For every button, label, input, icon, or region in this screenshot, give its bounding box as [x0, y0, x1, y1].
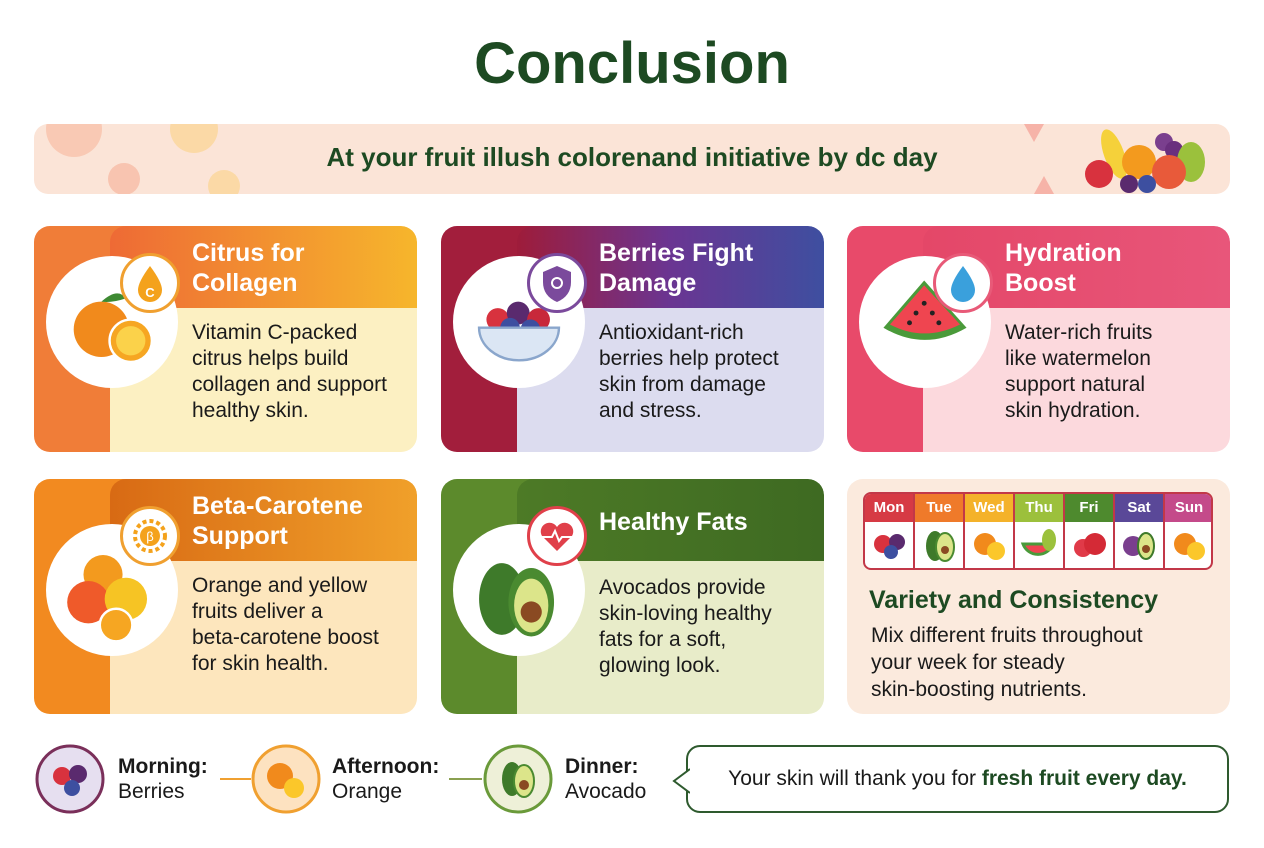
panel: berries: skin from damage	[599, 373, 766, 396]
fruit: watermelon	[859, 256, 991, 388]
weekly calendar: Thu	[1025, 499, 1053, 516]
icon: fruit bunch	[1085, 129, 1205, 193]
panel: healthy fats: skin-loving healthy	[599, 602, 772, 625]
fruit: oranges	[46, 524, 178, 656]
icon: vitamin C	[120, 253, 180, 313]
weekly calendar: Mon	[874, 499, 904, 516]
icon: beta sun: β	[146, 529, 154, 544]
weekly calendar: Tue	[926, 499, 952, 516]
text: variety: your week for steady	[871, 651, 1065, 674]
panel: beta-carotene: beta-carotene boost	[192, 626, 379, 649]
panel: beta-carotene	[34, 479, 417, 714]
icon: beta sun	[120, 506, 180, 566]
panel: berries	[441, 226, 824, 452]
weekly calendar	[863, 492, 1213, 570]
meal timeline	[36, 744, 646, 814]
meal timeline: Avocado	[565, 780, 646, 803]
text: variety: Mix different fruits throughout	[871, 624, 1143, 647]
icon: heart	[527, 506, 587, 566]
panel: hydration: Boost	[1005, 269, 1076, 297]
panel: beta-carotene: for skin health.	[192, 652, 329, 675]
panel: berries: Damage	[599, 269, 696, 297]
panel: healthy fats	[441, 479, 824, 714]
panel: variety and consistency	[847, 479, 1230, 714]
icon: water drop	[933, 253, 993, 313]
panel: citrus: Vitamin C-packed	[192, 321, 357, 344]
panel: berries: Antioxidant-rich	[599, 321, 744, 344]
panel: hydration	[847, 226, 1230, 452]
panel: berries: berries help protect	[599, 347, 779, 370]
meal timeline: Berries	[118, 780, 185, 803]
banner	[34, 124, 1230, 194]
title: Conclusion	[474, 31, 790, 96]
panel: healthy fats: Healthy Fats	[599, 508, 748, 536]
meal timeline: Afternoon:	[332, 755, 439, 778]
panel: hydration: like watermelon	[1005, 347, 1151, 370]
panel: citrus: Collagen	[192, 269, 298, 297]
weekly calendar: Wed	[973, 499, 1005, 516]
panel: hydration: Water-rich fruits	[1005, 321, 1152, 344]
panel: healthy fats: Avocados provide	[599, 576, 766, 599]
heading: variety: Variety and Consistency	[869, 586, 1158, 614]
fruit: orange	[46, 256, 178, 388]
fruit: avocado	[453, 524, 585, 656]
panel: berries: and stress.	[599, 399, 702, 422]
text: variety	[871, 624, 1143, 701]
panel: hydration: support natural	[1005, 373, 1145, 396]
weekly calendar: Sun	[1175, 499, 1203, 516]
panel: berries: Berries Fight	[599, 239, 753, 267]
fruit: berry bowl	[453, 256, 585, 388]
panel: beta-carotene: fruits deliver a	[192, 600, 323, 623]
text: variety: skin-boosting nutrients.	[871, 678, 1087, 701]
panel: citrus	[34, 226, 417, 452]
panel: citrus: Citrus for	[192, 239, 304, 267]
panel: hydration: Hydration	[1005, 239, 1122, 267]
callout	[686, 745, 1229, 813]
panel: citrus: collagen and support	[192, 373, 387, 396]
panel: beta-carotene: Beta-Carotene	[192, 492, 363, 520]
icon: shield	[527, 253, 587, 313]
panel: citrus: healthy skin.	[192, 399, 309, 422]
meal timeline: Morning:	[118, 755, 208, 778]
panel: citrus: citrus helps build	[192, 347, 348, 370]
banner: At your fruit illush colorenand initiative by dc day	[326, 142, 938, 172]
weekly calendar: Fri	[1079, 499, 1099, 516]
panel: healthy fats: fats for a soft,	[599, 628, 726, 651]
meal timeline: Orange	[332, 780, 402, 803]
panel: beta-carotene: Orange and yellow	[192, 574, 367, 597]
callout: Your skin will thank you for fresh fruit every day.	[728, 767, 1187, 790]
panel: beta-carotene: Support	[192, 522, 288, 550]
icon: vitamin C: C	[145, 285, 155, 300]
panel: hydration: skin hydration.	[1005, 399, 1140, 422]
weekly calendar: Sat	[1127, 499, 1151, 516]
meal timeline: Dinner:	[565, 755, 638, 778]
panel: healthy fats: glowing look.	[599, 654, 720, 677]
